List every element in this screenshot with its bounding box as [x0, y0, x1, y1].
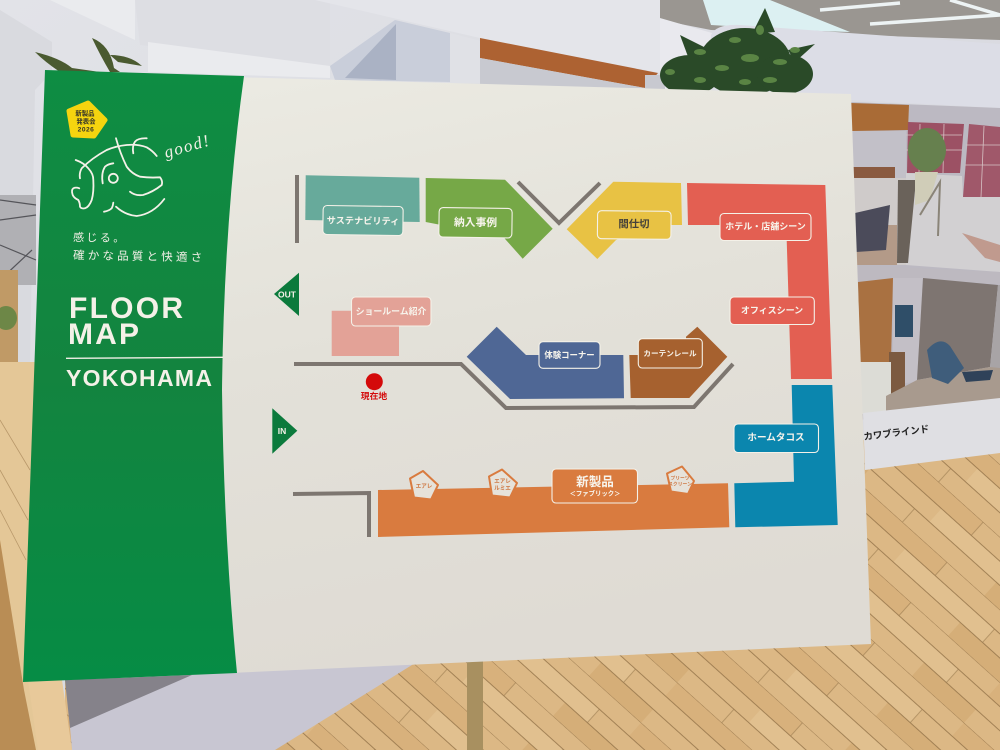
brand text on banner: カワブラインド	[863, 423, 930, 443]
zone: curtain rails: カーテンレール	[643, 349, 697, 358]
badge: air-ray lumie: ルミエ	[494, 485, 511, 492]
zone: new products	[378, 466, 729, 537]
badge: pleated screen: プリーツ	[670, 474, 690, 482]
tagline	[73, 230, 205, 264]
badge: pleated screen	[667, 466, 694, 494]
zone: sustainability: サステナビリティ	[327, 214, 399, 227]
tagline: 確かな品質と快適さ	[73, 248, 205, 264]
background: wood floor	[65, 440, 1000, 750]
badge: air-ray	[410, 471, 438, 500]
zone: partitions	[567, 182, 682, 259]
zone: curtain rails	[629, 327, 727, 398]
background: grey wall below board	[0, 540, 420, 750]
support post	[467, 655, 483, 750]
current location marker	[361, 373, 387, 401]
zone: hotel, shop and office scenes	[687, 183, 832, 379]
heading: floor map: MAP	[68, 318, 139, 351]
badge: air-ray lumie	[489, 470, 517, 498]
heading: Yokohama: YOKOHAMA	[66, 365, 212, 391]
label: new products fabric: ＜ファブリック＞	[569, 488, 621, 498]
zone: case studies	[426, 178, 553, 259]
zone: home tacos	[734, 385, 838, 527]
heading: floor map: FLOOR	[69, 292, 183, 325]
zone: case studies: 納入事例	[454, 215, 497, 229]
zone: experience corner	[467, 327, 624, 399]
tagline: 感じる。	[73, 230, 127, 245]
zone: hotel, shop and office scenes: ホテル・店舗シーン	[725, 220, 806, 232]
badge: air-ray lumie: エアレ	[494, 478, 511, 485]
background: left dark shelving and floor	[0, 195, 40, 750]
heading: floor map	[68, 292, 183, 351]
label: new products fabric	[552, 469, 638, 503]
badge: new product show 2026: 2026	[78, 126, 94, 134]
divider rule	[66, 357, 223, 358]
background: plants	[35, 8, 815, 96]
zone: partitions: 間仕切	[618, 218, 650, 230]
badge: air-ray: エアレ	[416, 483, 433, 490]
badge: new product show 2026: 発表会	[76, 116, 96, 126]
zone: home tacos: ホームタコス	[747, 432, 805, 444]
zone: showroom introduction	[332, 297, 431, 356]
logo: line drawing of a face	[72, 138, 164, 216]
label: new products fabric: 新製品	[576, 474, 614, 489]
badge: new product show 2026: 新製品	[75, 108, 95, 118]
arrow: in: IN	[278, 426, 286, 436]
walls	[293, 175, 733, 537]
current location marker: 現在地	[361, 390, 387, 401]
green side panel	[23, 70, 244, 682]
zone: showroom introduction: ショールーム紹介	[356, 306, 426, 316]
background: product photo panels	[850, 102, 1000, 470]
logo caption: good!: good!	[162, 131, 212, 162]
badge: new product show 2026	[69, 103, 105, 136]
floor map board	[120, 74, 871, 678]
arrow: in	[272, 408, 297, 454]
zone: sustainability	[305, 175, 420, 236]
zone: experience corner: 体験コーナー	[544, 350, 595, 360]
arrow: out	[274, 273, 299, 316]
zone: hotel, shop and office scenes: オフィスシーン	[741, 306, 803, 316]
arrow: out: OUT	[278, 290, 297, 300]
badge: pleated screen: スクリーン	[668, 480, 692, 488]
